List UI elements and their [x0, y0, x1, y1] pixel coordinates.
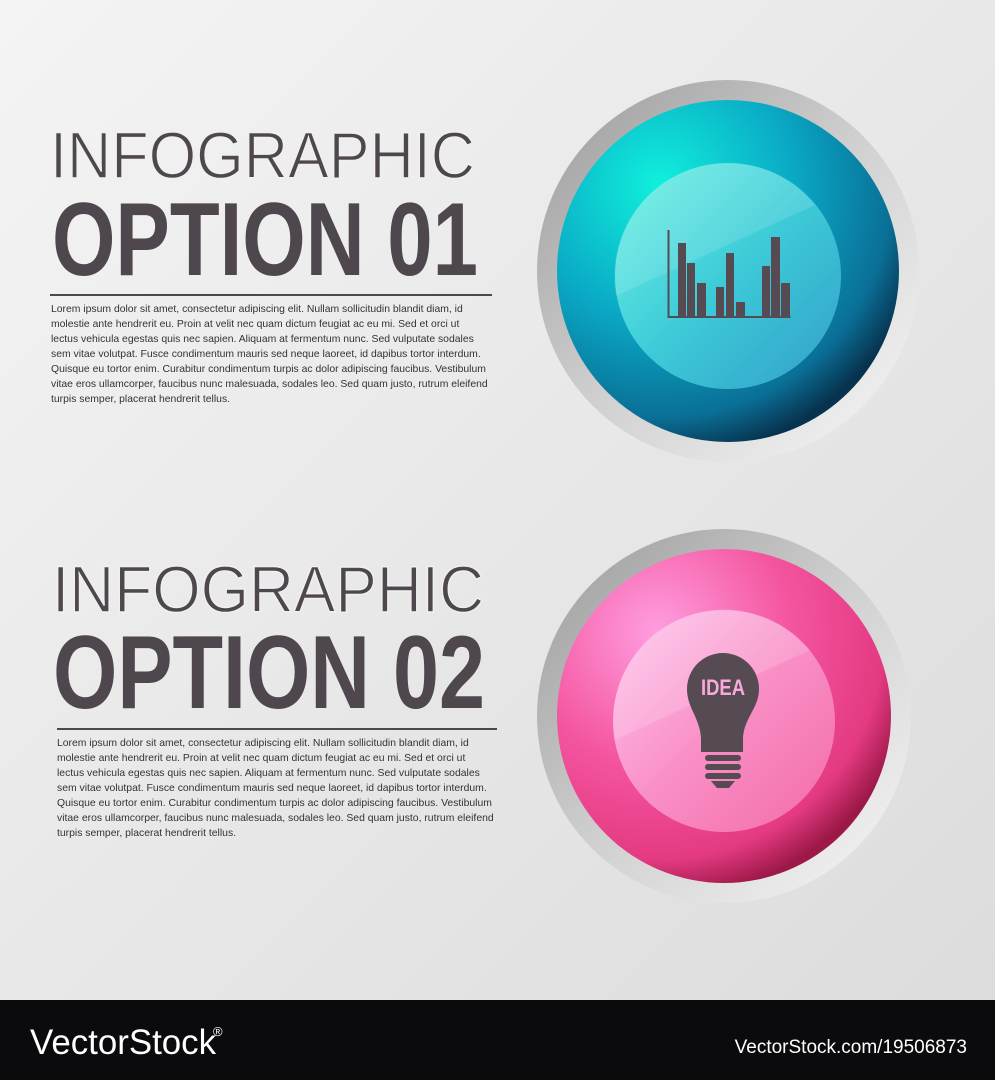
button: pink idea: [537, 529, 911, 903]
title: infographic option 02: OPTION 02: [53, 615, 485, 731]
title: infographic option 02: INFOGRAPHIC: [52, 552, 484, 626]
footer bar: ®: [213, 1024, 223, 1039]
text block: option 02: turpis semper, placerat hendrerit tellus.: [57, 828, 236, 839]
text block: option 01: vitae eros ullamcorper, faucibus nunc malesuada, sodales leo. Sed quam justo, rutrum eleifend: [51, 379, 488, 390]
text block: option 01: turpis semper, placerat hendrerit tellus.: [51, 394, 230, 405]
footer bar: VectorStock.com/19506873: [735, 1037, 967, 1058]
text block: option 01: Quisque eu tortor enim. Curabitur condimentum turpis ac dolor adipiscing faucibus. Vestibulum: [51, 364, 486, 375]
text block: option 01: [51, 304, 488, 405]
text block: option 02: [57, 738, 494, 839]
text block: option 01: sem vitae volutpat. Fusce condimentum mauris sed neque laoreet, id dapibus tortor interdum.: [51, 349, 481, 360]
title: infographic option 01: [50, 118, 478, 298]
icon: bar chart: [668, 230, 790, 318]
title: infographic option 01: INFOGRAPHIC: [50, 118, 475, 192]
text block: option 02: sem vitae volutpat. Fusce condimentum mauris sed neque laoreet, id dapibus tortor interdum.: [57, 783, 487, 794]
footer bar: [0, 1000, 995, 1080]
text block: option 01: molestie ante hendrerit eu. Proin at velit nec quam dictum feugiat ac eu mi. Sed et orci ut: [51, 319, 459, 330]
text block: option 02: Quisque eu tortor enim. Curabitur condimentum turpis ac dolor adipiscing faucibus. Vestibulum: [57, 798, 492, 809]
text block: option 02: molestie ante hendrerit eu. Proin at velit nec quam dictum feugiat ac eu mi. Sed et orci ut: [57, 753, 465, 764]
text block: option 02: vitae eros ullamcorper, faucibus nunc malesuada, sodales leo. Sed quam justo, rutrum eleifend: [57, 813, 494, 824]
icon: light bulb: IDEA: [701, 675, 745, 700]
text block: option 01: lectus vehicula egestas quis nec sapien. Aliquam at fermentum nunc. Sed vulputate sodales: [51, 334, 474, 345]
text block: option 02: Lorem ipsum dolor sit amet, consectetur adipiscing elit. Nullam sollicitudin blandit diam, id: [57, 738, 469, 749]
button: blue chart: [537, 80, 919, 462]
title: infographic option 02: [52, 552, 485, 731]
title: infographic option 01: OPTION 01: [52, 182, 478, 298]
footer bar: VectorStock: [30, 1023, 216, 1062]
text block: option 01: Lorem ipsum dolor sit amet, consectetur adipiscing elit. Nullam sollicitudin blandit diam, id: [51, 304, 463, 315]
text block: option 02: lectus vehicula egestas quis nec sapien. Aliquam at fermentum nunc. Sed vulputate sodales: [57, 768, 480, 779]
icon: light bulb: [687, 653, 759, 788]
